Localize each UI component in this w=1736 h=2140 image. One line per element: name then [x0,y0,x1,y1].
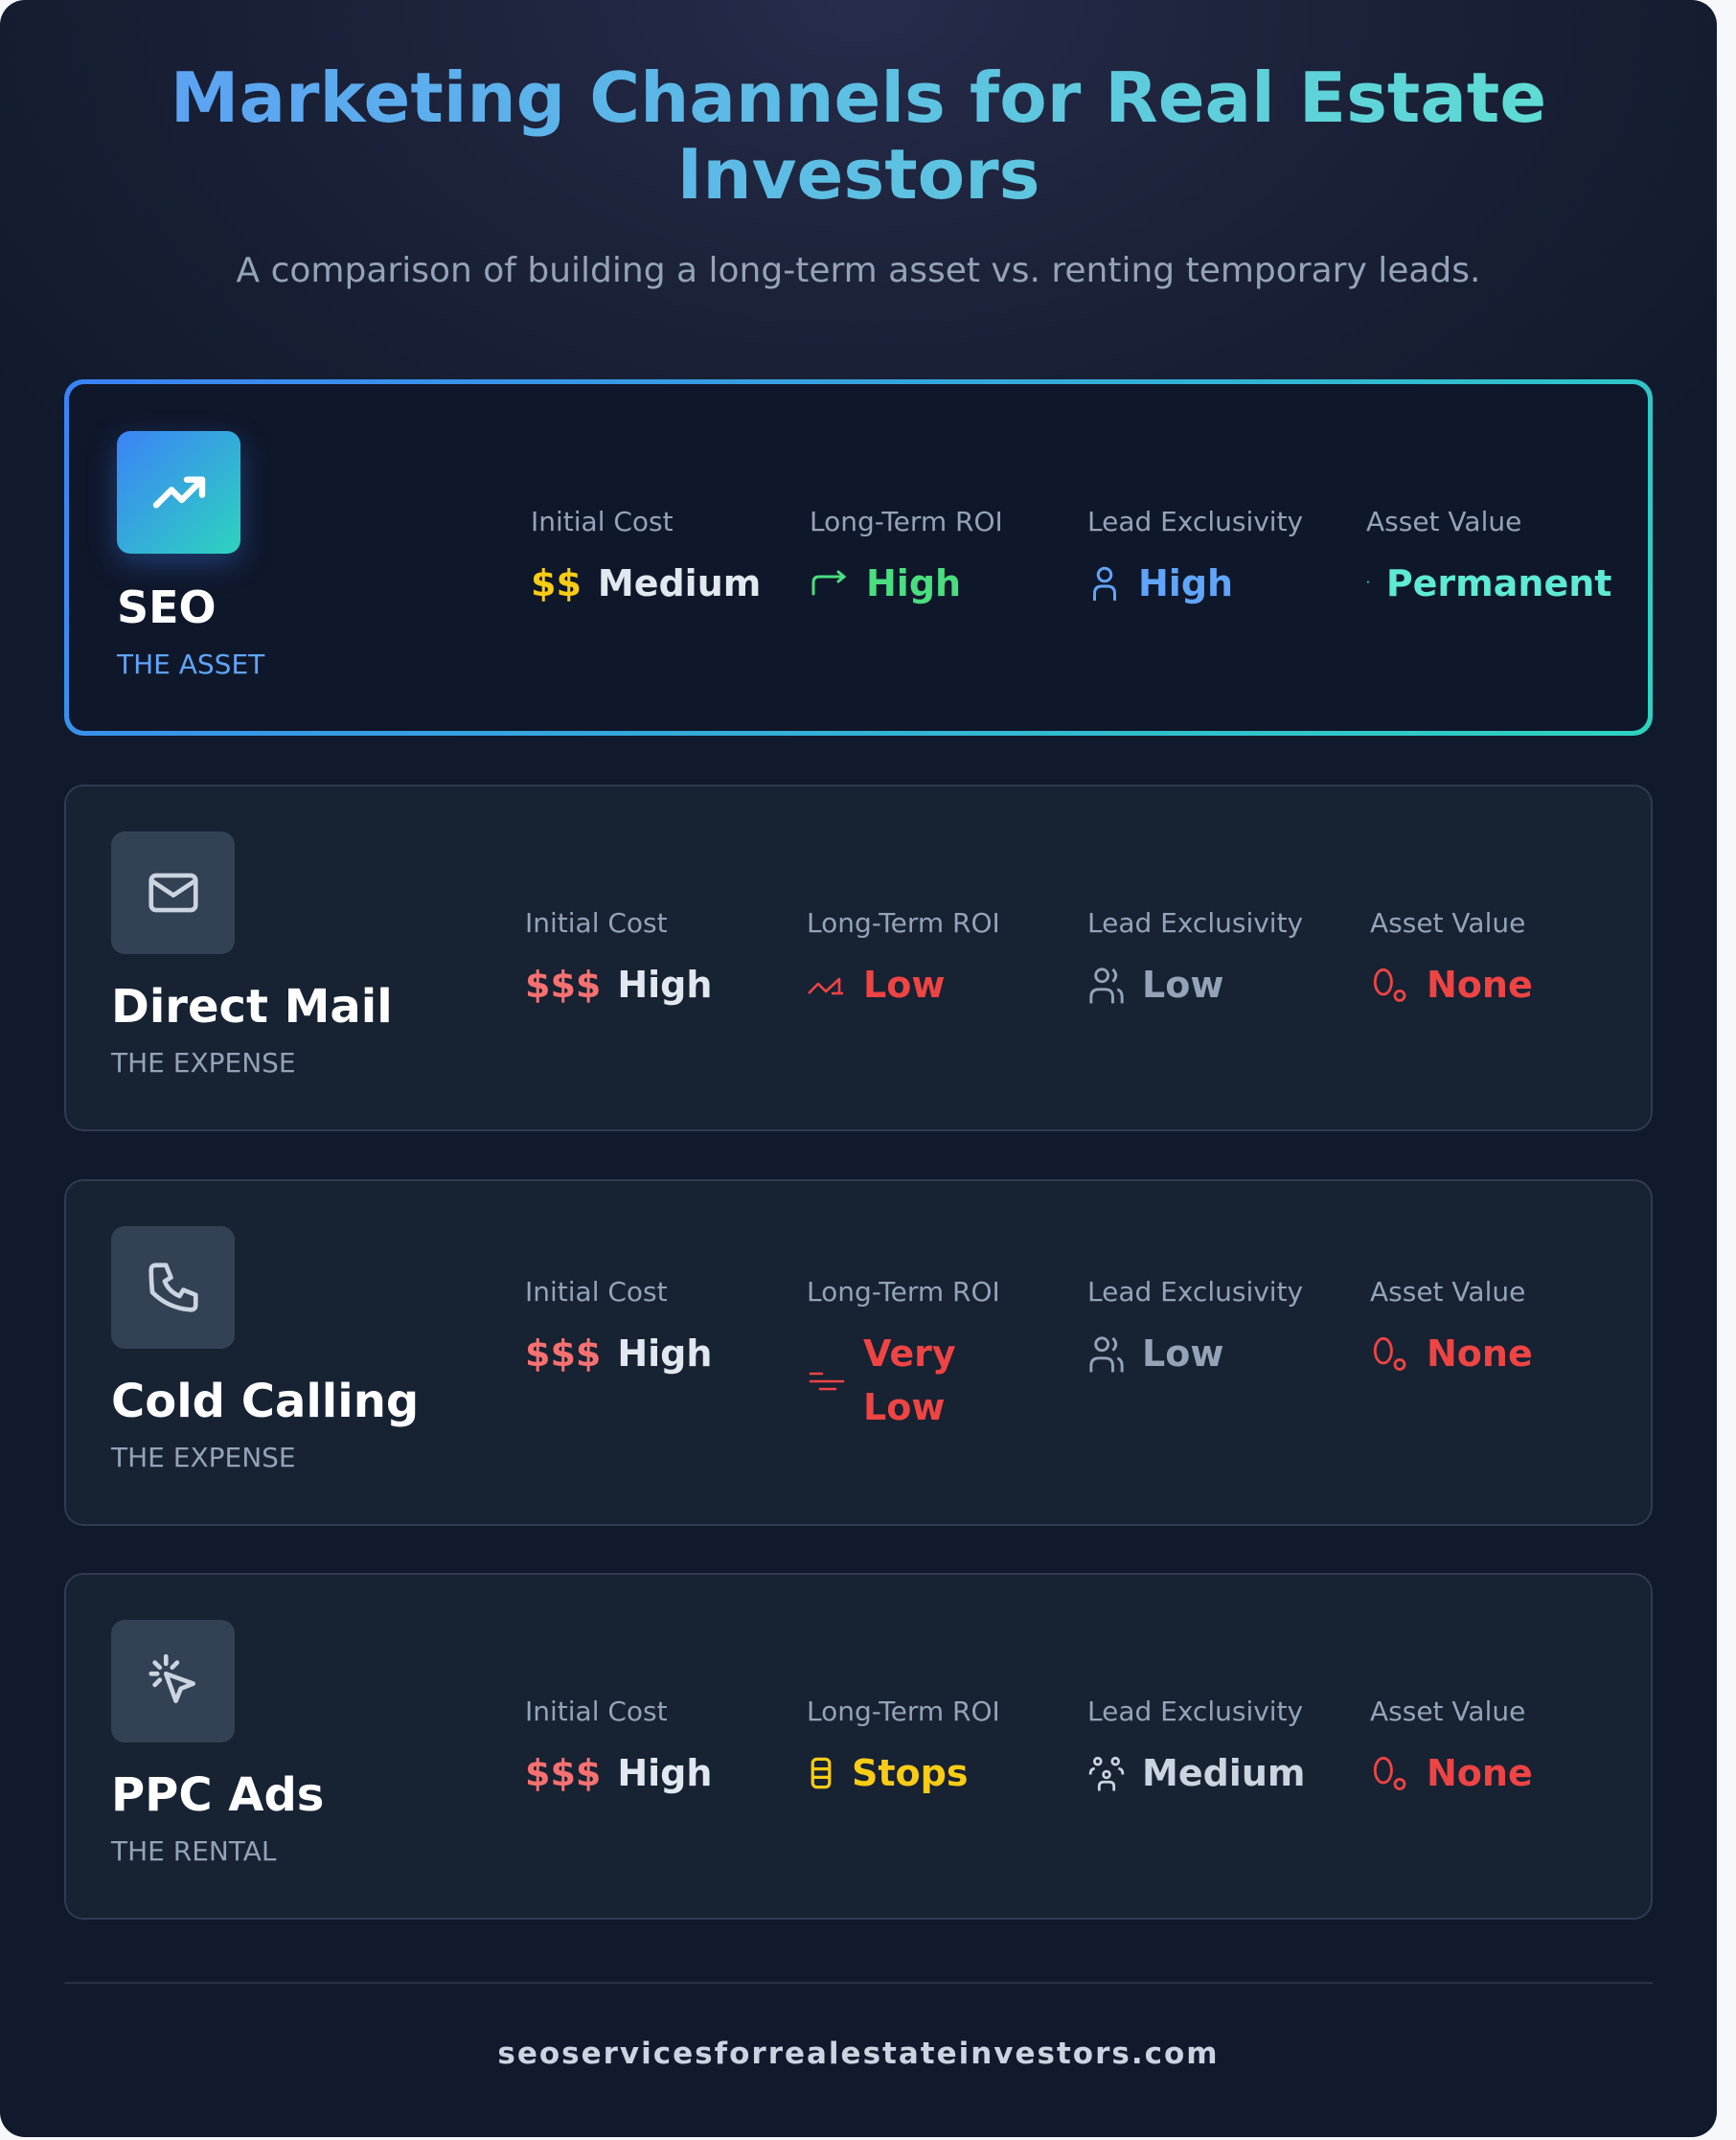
metric: long-term ROI: Very [863,1332,956,1375]
panel: Direct Mail: Asset Value [1370,907,1525,939]
metric: long-term ROI [807,907,1000,1006]
panel: PPC Ads: Initial Cost [525,1696,668,1727]
panel: PPC Ads: Long-Term ROI [807,1696,1000,1727]
panel: Direct Mail: Long-Term ROI [807,907,1000,939]
panel: Cold Calling: Lead Exclusivity [1087,1276,1303,1308]
panel: SEO: Long-Term ROI [810,506,1003,537]
panel: PPC Ads: Medium [1142,1752,1305,1794]
heading: Cold Calling: Cold Calling [111,1375,419,1428]
icon: envelope [111,831,235,954]
icon: pointer click [111,1620,235,1742]
metric: lead exclusivity [1087,1696,1305,1794]
metric: asset value [1366,506,1611,604]
panel: Cold Calling: Initial Cost [525,1276,668,1308]
panel: SEO: Lead Exclusivity [1087,506,1303,537]
metric: lead exclusivity [1087,506,1303,604]
panel: SEO: High [866,562,961,604]
metric: long-term ROI: Low [863,1386,945,1428]
metric: asset value [1370,907,1533,1006]
title: Investors [677,134,1039,215]
title: Marketing Channels for Real Estate [171,57,1546,138]
metric: lead exclusivity [1087,907,1303,1006]
text: the expense: THE EXPENSE [111,1047,296,1079]
panel: Direct Mail: Low [1142,964,1223,1006]
metric: long-term ROI [810,506,1003,604]
panel: SEO: Permanent [1386,562,1611,604]
panel: PPC Ads: High [617,1752,712,1794]
panel: PPC Ads: Asset Value [1370,1696,1525,1727]
panel: Direct Mail: None [1427,964,1533,1006]
panel: Cold Calling [64,1179,1653,1526]
panel: Cold Calling: High [617,1332,712,1375]
panel: SEO: Asset Value [1366,506,1521,537]
panel: PPC Ads: Stops [852,1752,968,1794]
panel: Direct Mail [64,785,1653,1131]
icon: trending up [117,431,240,554]
heading: SEO: SEO [117,581,217,633]
panel: PPC Ads: None [1427,1752,1533,1794]
panel: SEO [64,379,1653,736]
panel: PPC Ads [64,1573,1653,1920]
panel: Cold Calling: Asset Value [1370,1276,1525,1308]
title [0,59,1717,213]
footer: website: seoservicesforrealestateinvestors.com [497,2037,1220,2071]
panel: Direct Mail: Lead Exclusivity [1087,907,1303,939]
metric: asset value [1370,1696,1533,1794]
panel: PPC Ads: Lead Exclusivity [1087,1696,1303,1727]
metric: lead exclusivity [1087,1276,1303,1375]
panel: SEO: Initial Cost [531,506,674,537]
metric: long-term ROI [807,1696,1000,1794]
heading: PPC Ads: PPC Ads [111,1768,324,1822]
panel: SEO: Medium [598,562,761,604]
text: the expense: THE EXPENSE [111,1442,296,1473]
text: the asset: THE ASSET [117,649,264,680]
panel: SEO: High [1138,562,1233,604]
panel: PPC Ads: $$$ [525,1752,601,1794]
metric: asset value [1370,1276,1533,1375]
metric: initial cost [525,1696,712,1794]
panel: SEO: · [1366,578,1370,588]
heading: Direct Mail: Direct Mail [111,980,393,1034]
metric: long-term ROI: Long-Term ROI [807,1276,1000,1308]
metric: initial cost [531,506,761,604]
metric: initial cost [525,907,712,1006]
text: the rental: THE RENTAL [111,1835,277,1867]
panel: Direct Mail: $$$ [525,964,601,1006]
icon: phone [111,1226,235,1349]
subtitle: A comparison of building a long-term asset vs. renting temporary leads. [237,251,1480,290]
panel: Cold Calling: $$$ [525,1332,601,1375]
panel: Direct Mail: High [617,964,712,1006]
panel: Cold Calling: None [1427,1332,1533,1375]
panel: Direct Mail: Initial Cost [525,907,668,939]
panel: Cold Calling: Low [1142,1332,1223,1375]
panel: Direct Mail: Low [863,964,945,1006]
metric: initial cost [525,1276,712,1375]
metric: long-term ROI [807,1276,1000,1428]
panel: SEO: $$ [531,562,582,604]
